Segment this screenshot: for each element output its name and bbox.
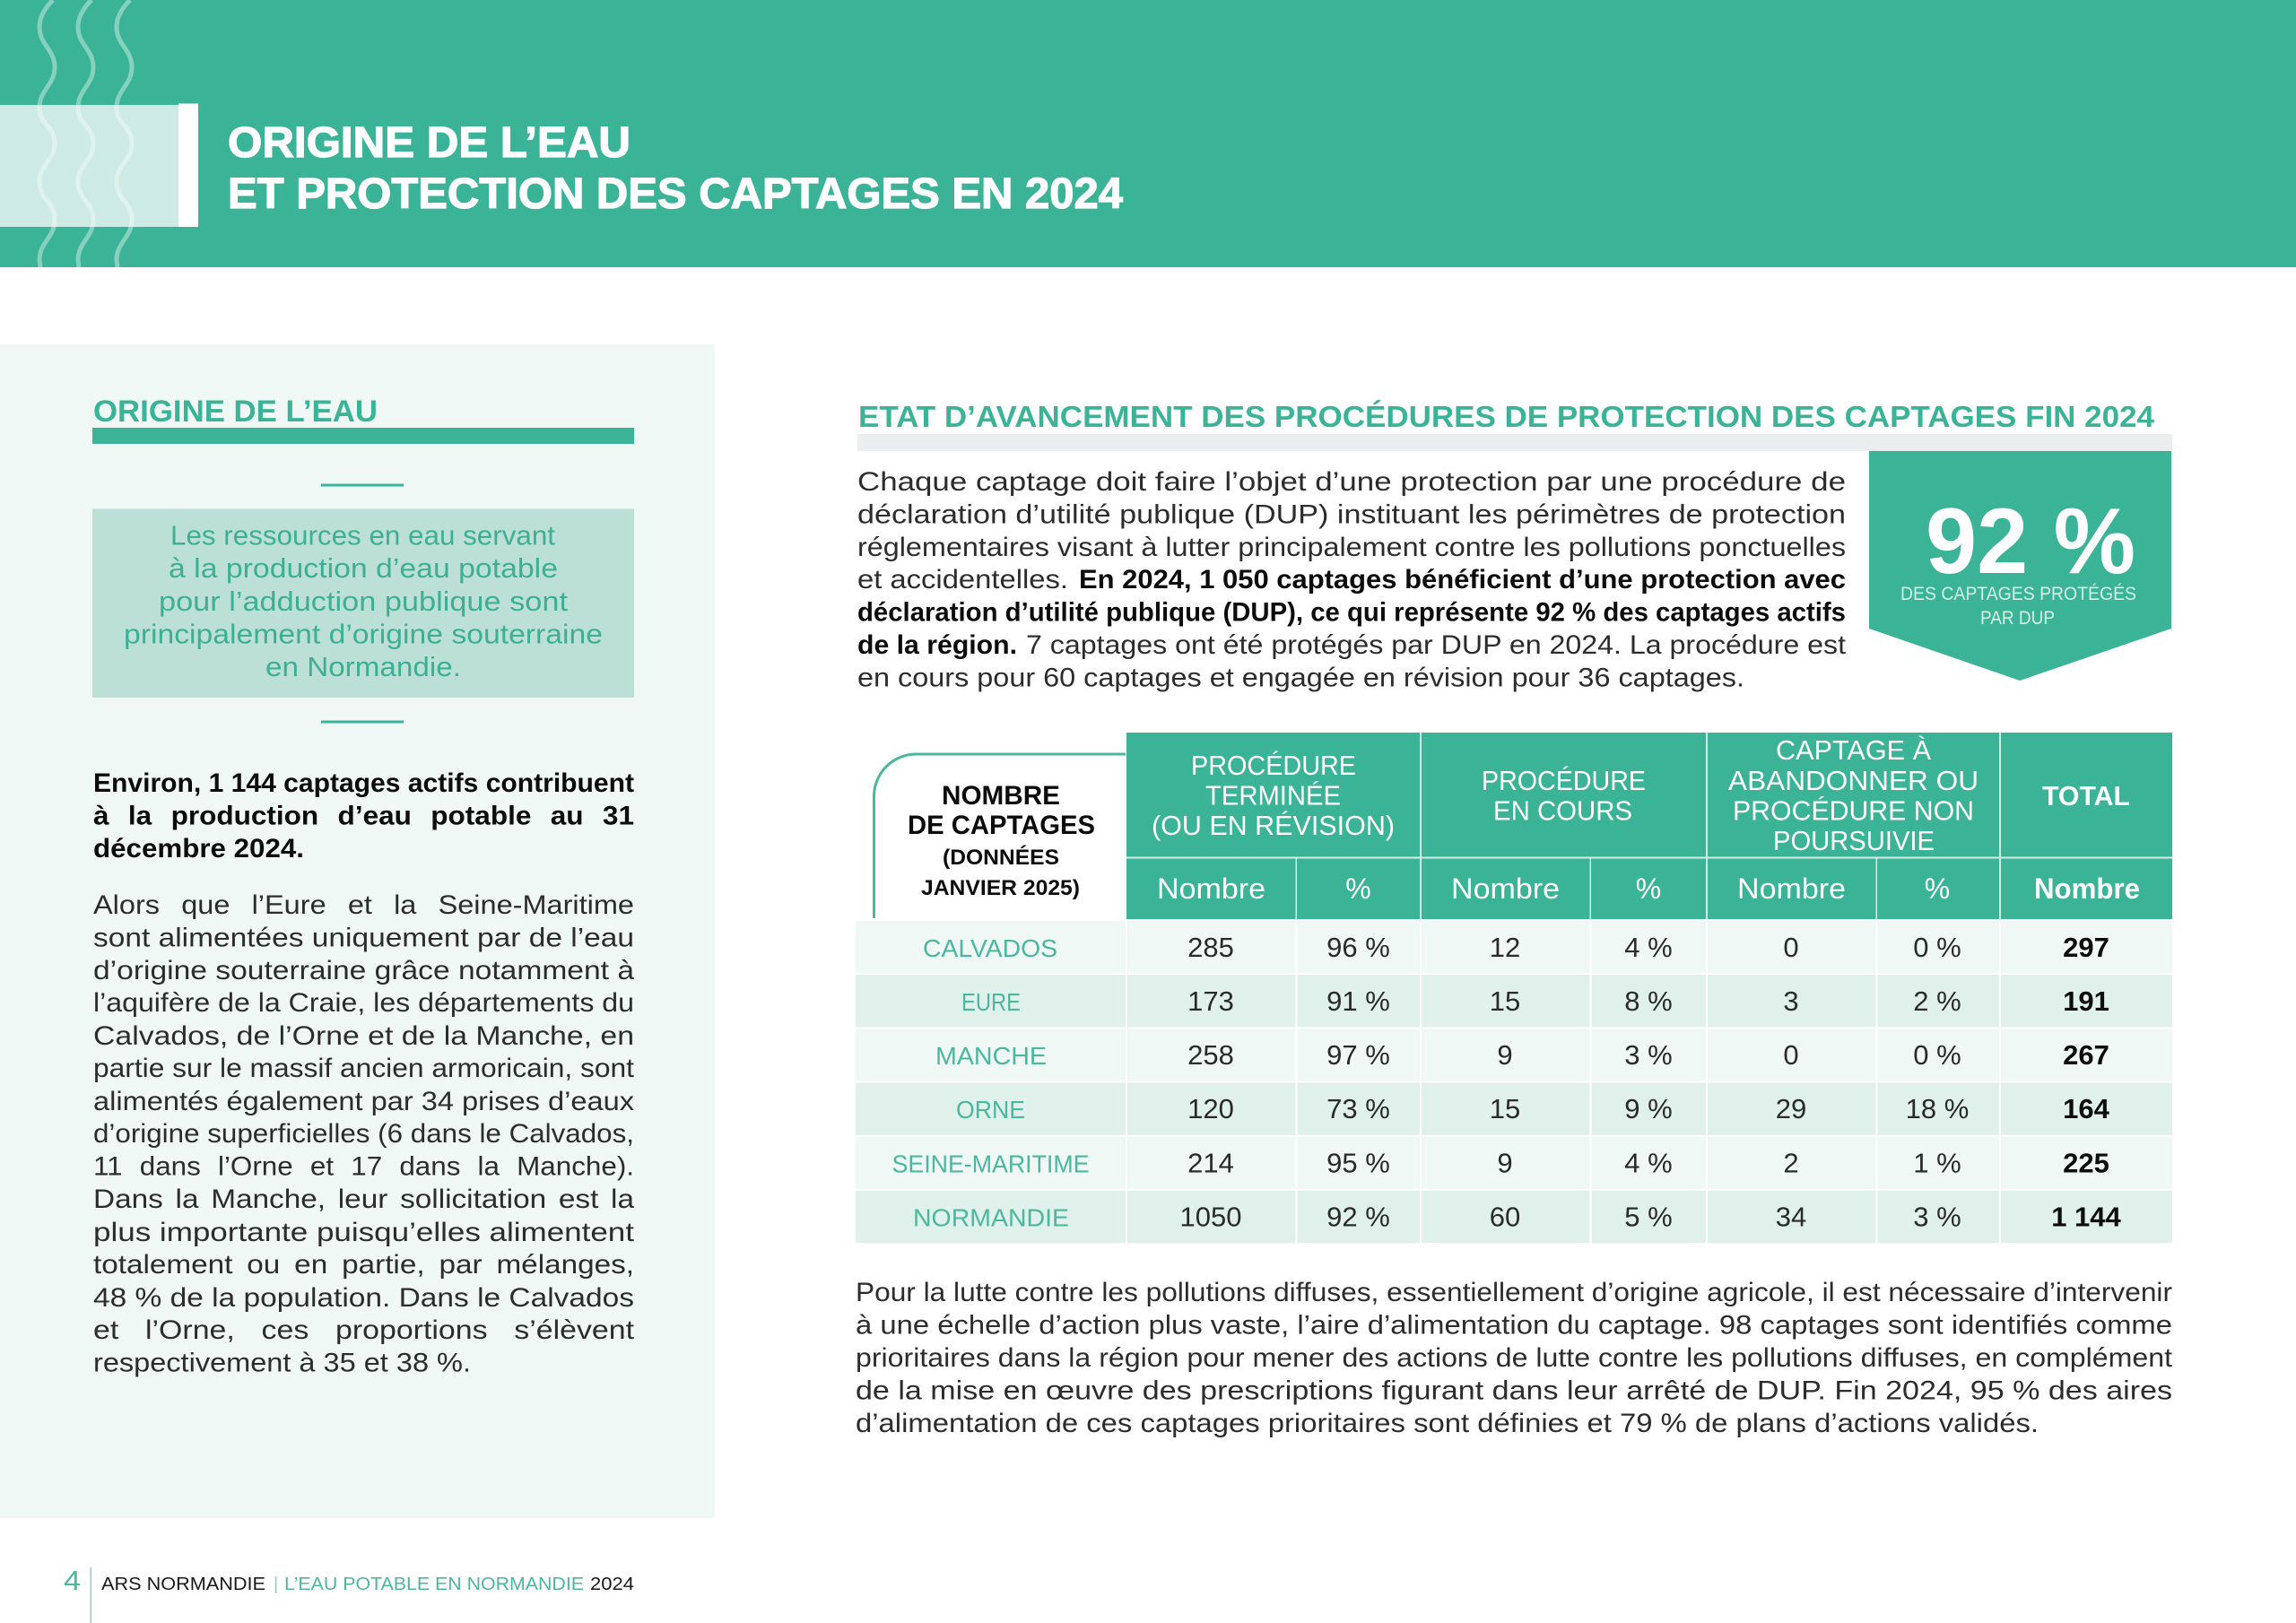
table corner label: DE CAPTAGES [908, 811, 1095, 840]
row: Calvados: 285 [1187, 932, 1234, 963]
header: procédure en cours [1482, 765, 1646, 827]
row: Normandie: 3 % [1913, 1202, 1961, 1232]
row: Calvados: 297 [2063, 932, 2109, 963]
sub-header row: % [1925, 872, 1950, 905]
row: Seine-Maritime: SEINE-MARITIME [891, 1150, 1089, 1178]
body text: l’aquifère de la Craie, les départements du [93, 988, 634, 1018]
intro text: en cours pour 60 captages et engagée en révision pour 36 captages. [857, 664, 1744, 692]
table: nombre de captages [856, 733, 2172, 1244]
header: procédure terminée: PROCÉDURE [1191, 750, 1356, 781]
callout: ressources en eau: en Normandie. [265, 651, 461, 682]
footer text: | [274, 1575, 278, 1594]
sub-header row: Nombre [1451, 872, 1560, 905]
footer text [101, 1575, 634, 1594]
footer text: L’EAU POTABLE EN NORMANDIE [284, 1575, 584, 1594]
body text: et l’Orne, ces proportions s’élèvent [93, 1315, 635, 1345]
body text: d’origine superficielles (6 dans le Calvados, [93, 1119, 634, 1149]
sub-header row: Nombre [1737, 872, 1846, 905]
footer [64, 1565, 634, 1623]
body text: Alors que l’Eure et la Seine-Maritime [93, 890, 634, 920]
sub-header row [1157, 872, 2140, 905]
row: Orne: 15 [1490, 1093, 1520, 1124]
row: Orne: 18 % [1906, 1093, 1969, 1124]
body text: Dans la Manche, leur sollicitation est la [93, 1185, 634, 1214]
row: Orne: 120 [1187, 1093, 1234, 1124]
title: ET PROTECTION DES CAPTAGES EN 2024 [228, 170, 1123, 218]
body text: Calvados, de l’Orne et de la Manche, en [93, 1021, 634, 1051]
header: total: TOTAL [2042, 780, 2130, 812]
icon: water waves [39, 0, 132, 267]
intro text: réglementaires visant à lutter principalement contre les pollutions ponctuelles [857, 533, 1846, 562]
row: Calvados: 12 [1490, 932, 1520, 963]
table corner label [874, 754, 1126, 918]
row: Eure: 15 [1490, 985, 1520, 1017]
footer text: 2024 [590, 1575, 634, 1594]
intro text [857, 467, 1847, 692]
section heading: etat d'avancement: ETAT D’AVANCEMENT DES PROCÉDURES DE PROTECTION DES CAPTAGES FIN 2024 [858, 400, 2155, 433]
section heading: etat d'avancement [857, 400, 2172, 451]
body text: respectivement à 35 et 38 %. [93, 1349, 471, 1377]
row: Seine-Maritime: 1 % [1913, 1148, 1961, 1178]
title: ORIGINE DE L’EAU [228, 119, 631, 167]
header: procédure terminée: TERMINÉE [1205, 780, 1341, 811]
row: Orne: 29 [1776, 1093, 1806, 1124]
callout badge: 92 %: DES CAPTAGES PROTÉGÉS [1900, 584, 2136, 604]
row: Seine-Maritime: 4 % [1624, 1148, 1673, 1178]
row: Manche: 0 % [1913, 1039, 1961, 1071]
row backgrounds [856, 921, 2172, 1244]
row: Manche: 258 [1187, 1039, 1234, 1071]
row: Calvados: 0 [1783, 932, 1799, 963]
table corner label: JANVIER 2025) [921, 876, 1080, 900]
intro text: 7 captages ont été protégés par DUP en 2024. La procédure est [1026, 630, 1847, 660]
header: captage à abandonner [1728, 734, 1979, 856]
header: procédure terminée [1152, 750, 1395, 841]
callout: ressources en eau: principalement d’origine souterraine [124, 619, 603, 649]
closing text: pollutions diffuses: prioritaires dans la région pour mener des actions de lutte contre les pollutions diffuses, en complément [856, 1343, 2173, 1373]
row: Normandie [913, 1202, 2122, 1232]
row: Normandie: 60 [1490, 1202, 1520, 1232]
header: procédure en cours: EN COURS [1493, 794, 1632, 827]
row: Calvados: 4 % [1624, 932, 1673, 963]
body text: 48 % de la population. Dans le Calvados [93, 1283, 634, 1313]
row: Normandie: 34 [1776, 1202, 1806, 1232]
key statement: décembre 2024. [93, 834, 304, 864]
callout: ressources en eau: Les ressources en eau servant [170, 520, 555, 551]
row: Calvados: 0 % [1913, 932, 1961, 963]
intro text: de la région. [857, 630, 1017, 660]
header: captage à abandonner: PROCÉDURE NON [1733, 794, 1974, 827]
sub-header row: Nombre [2034, 872, 2140, 905]
body text: sont alimentées uniquement par de l’eau [93, 924, 634, 952]
row: Calvados: 96 % [1326, 932, 1390, 963]
row: Eure: 2 % [1913, 985, 1961, 1017]
row: Normandie: 1050 [1180, 1202, 1241, 1232]
body text [93, 890, 635, 1377]
row: Calvados: CALVADOS [923, 934, 1057, 962]
footer text: ARS NORMANDIE [101, 1575, 265, 1594]
callout badge: 92 %: 92 % [1926, 490, 2135, 594]
body text: d’origine souterraine grâce notamment à [93, 956, 634, 985]
body text: partie sur le massif ancien armoricain, sont [93, 1054, 635, 1083]
row: Normandie: 1 144 [2051, 1202, 2122, 1232]
row: Eure: 173 [1187, 985, 1234, 1017]
white accent bar [178, 104, 198, 227]
intro text: déclaration d’utilité publique (DUP), ce qui représente 92 % des captages actifs [857, 597, 1846, 628]
row: Orne: 9 % [1624, 1093, 1673, 1124]
closing text: pollutions diffuses: de la mise en œuvre des prescriptions figurant dans leur arrêté de DUP. Fin 2024, 95 % des aires [856, 1376, 2172, 1406]
intro text: En 2024, 1 050 captages bénéficient d’une protection avec [1079, 565, 1846, 595]
pale title block [0, 105, 178, 227]
row: Calvados [923, 932, 2109, 963]
header: procédure en cours: PROCÉDURE [1482, 765, 1646, 796]
closing text: pollutions diffuses [856, 1278, 2173, 1438]
row: Eure: EURE [961, 988, 1021, 1016]
panel: origine de l'eau [0, 344, 715, 1518]
body text: 11 dans l’Orne et 17 dans la Manche). [93, 1151, 634, 1182]
row: Manche [935, 1039, 2109, 1071]
callout: ressources en eau: à la production d’eau potable [169, 552, 558, 584]
row: Eure: 91 % [1326, 985, 1390, 1017]
header banner [0, 0, 2296, 267]
key statement [93, 768, 634, 864]
panel heading: ORIGINE DE L’EAU [93, 395, 378, 429]
key statement: à la production d’eau potable au 31 [93, 802, 634, 830]
row: Seine-Maritime: 2 [1783, 1148, 1799, 1178]
body text: alimentés également par 34 prises d’eaux [93, 1087, 634, 1116]
row: Normandie: 5 % [1624, 1202, 1673, 1232]
callout badge: 92 % [1869, 451, 2171, 681]
header: captage à abandonner: ABANDONNER OU [1728, 765, 1979, 796]
table corner label: (DONNÉES [943, 845, 1059, 870]
row: Orne: ORNE [956, 1096, 1025, 1124]
sub-header row: % [1636, 872, 1661, 905]
intro text: et accidentelles. [857, 565, 1068, 595]
table corner label: NOMBRE [942, 781, 1060, 811]
header: captage à abandonner: CAPTAGE À [1776, 734, 1931, 766]
title [228, 119, 1123, 218]
sub-header row: Nombre [1157, 872, 1265, 905]
row: Eure [961, 985, 2109, 1017]
row: Seine-Maritime: 214 [1187, 1148, 1234, 1178]
row: Orne [956, 1093, 2110, 1124]
row: Manche: 97 % [1326, 1039, 1390, 1071]
row: Seine-Maritime [891, 1148, 2109, 1178]
callout: ressources en eau [92, 509, 634, 698]
row: Manche: 0 [1783, 1039, 1799, 1071]
row: Seine-Maritime: 225 [2063, 1148, 2109, 1178]
closing text: pollutions diffuses: d’alimentation de ces captages prioritaires sont définies et 79 % de plans d’actions validés. [856, 1409, 2039, 1438]
row: Manche: 3 % [1624, 1039, 1673, 1071]
page number: 4 [64, 1565, 81, 1596]
closing text: pollutions diffuses: Pour la lutte contre les pollutions diffuses, essentiellement d’origine agricole, il est nécessaire d’intervenir [856, 1278, 2172, 1307]
intro text: Chaque captage doit faire l’objet d’une protection par une procédure de [857, 467, 1846, 497]
sub-header row: % [1345, 872, 1371, 905]
body text: totalement ou en partie, par mélanges, [93, 1250, 634, 1280]
closing text: pollutions diffuses: à une échelle d’action plus vaste, l’aire d’alimentation du captage. 98 captages sont identifiés comme [856, 1311, 2172, 1340]
header: captage à abandonner: POURSUIVIE [1773, 825, 1935, 856]
callout: ressources en eau: pour l’adduction publique sont [159, 586, 568, 617]
row: Orne: 73 % [1326, 1093, 1390, 1124]
row: Manche: MANCHE [935, 1042, 1047, 1070]
row: Normandie: NORMANDIE [913, 1203, 1069, 1232]
row: Eure: 3 [1783, 985, 1799, 1017]
body text: plus importante puisqu’elles alimentent [93, 1218, 635, 1247]
intro text: déclaration d’utilité publique (DUP) instituant les périmètres de protection [857, 500, 1846, 529]
row: Manche: 267 [2063, 1039, 2109, 1071]
row: Orne: 164 [2063, 1093, 2110, 1124]
table header [1126, 733, 2172, 919]
header: procédure terminée: (OU EN RÉVISION) [1152, 810, 1395, 841]
row: Normandie: 92 % [1326, 1202, 1390, 1232]
row: Eure: 191 [2063, 985, 2109, 1017]
callout badge: 92 %: PAR DUP [1980, 608, 2055, 629]
key statement: Environ, 1 144 captages actifs contribuent [93, 768, 634, 798]
row: Eure: 8 % [1624, 985, 1673, 1017]
row: Seine-Maritime: 95 % [1326, 1148, 1390, 1178]
row: Seine-Maritime: 9 [1497, 1148, 1513, 1178]
row: Manche: 9 [1497, 1039, 1513, 1071]
